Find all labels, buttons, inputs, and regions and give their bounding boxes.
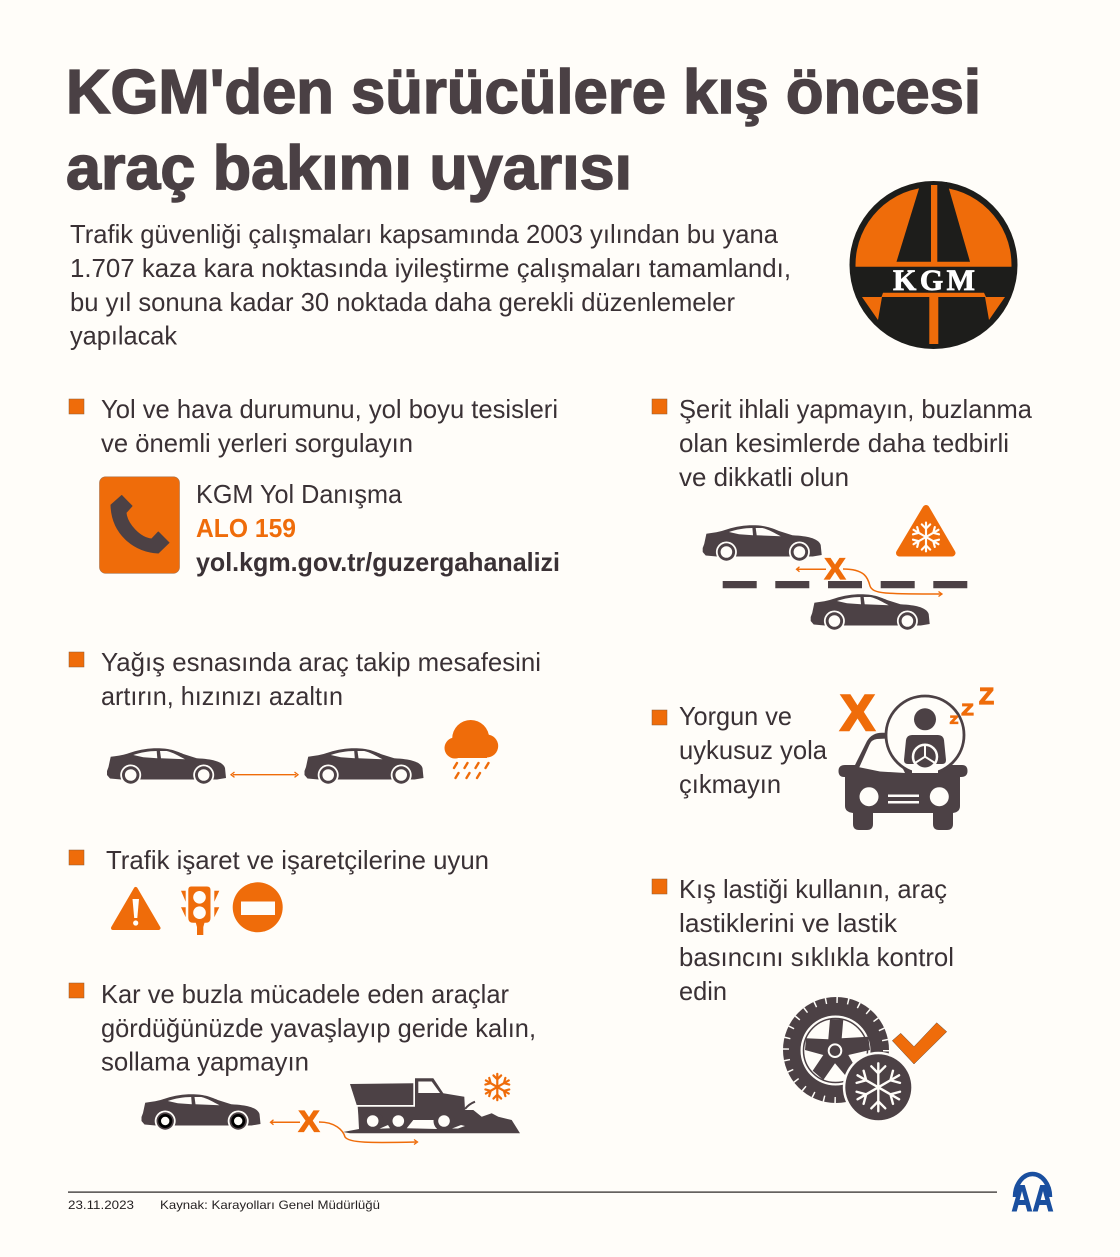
intro text: bu yıl sonuna kadar 30 noktada daha gerekli düzenlemeler xyxy=(70,287,735,317)
road markings xyxy=(723,581,967,588)
icon: car xyxy=(142,1094,260,1132)
icon: orange snowflake xyxy=(484,1074,511,1100)
intro text: yapılacak xyxy=(70,320,178,350)
source: Kaynak: Karayolları Genel Müdürlüğü xyxy=(160,1198,380,1212)
text: winter tyres: basıncını sıklıkla kontrol xyxy=(679,942,954,972)
icon: check mark xyxy=(892,1023,947,1064)
icon: X mark: X xyxy=(840,685,874,741)
text: winter tyres: edin xyxy=(679,976,727,1006)
icon: car 1 xyxy=(107,748,226,786)
text: road info: ve önemli yerleri sorgulayın xyxy=(101,428,413,458)
panel: traffic signs xyxy=(69,845,489,935)
panel: rain distance xyxy=(69,647,541,786)
icon: AA logo: AA xyxy=(1012,1178,1054,1219)
icon: car 2 xyxy=(304,748,424,786)
bullet xyxy=(69,399,84,414)
text: hotline: KGM Yol Danışma xyxy=(196,479,403,509)
arrow: overtaking forbidden: X xyxy=(298,1106,320,1138)
text: road info: Yol ve hava durumunu, yol boyu tesisleri xyxy=(101,394,558,424)
icon: KGM logo xyxy=(850,181,1018,349)
bullet xyxy=(69,983,84,998)
bullet xyxy=(69,850,84,865)
icon: snow plough xyxy=(343,1078,520,1133)
footer xyxy=(68,1192,997,1212)
text: hotline: yol.kgm.gov.tr/guzergahanalizi xyxy=(196,547,560,577)
panel: road info xyxy=(69,394,560,577)
text: snow plough: Kar ve buzla mücadele eden araçlar xyxy=(101,979,509,1009)
icon: ice warning sign xyxy=(900,508,952,553)
panel: tired driver xyxy=(652,683,994,830)
text: snow plough xyxy=(101,979,536,1076)
intro text: 1.707 kaza kara noktasında iyileştirme çalışmaları tamamlandı, xyxy=(70,253,791,283)
text: road info xyxy=(101,394,558,458)
text: lane violation: Şerit ihlali yapmayın, buzlanma xyxy=(679,394,1033,424)
text: tired driver: uykusuz yola xyxy=(679,735,828,765)
arrow: overtaking forbidden xyxy=(270,1106,418,1144)
icon: sleep Z letters: Z xyxy=(962,702,974,719)
icon: warning triangle xyxy=(113,889,158,928)
text: winter tyres xyxy=(679,874,954,1006)
panel: winter tyres xyxy=(652,874,954,1123)
icon: sleep Z letters xyxy=(950,683,994,726)
icon: sleep Z letters: Z xyxy=(950,714,958,726)
text: traffic signs: Trafik işaret ve işaretçilerine uyun xyxy=(106,845,489,875)
text: hotline xyxy=(196,479,560,577)
title: KGM'den sürücülere kış öncesi xyxy=(66,58,981,127)
bullet xyxy=(69,652,84,667)
bullet xyxy=(652,710,667,725)
arrow: distance xyxy=(231,772,298,777)
icon: snow disc xyxy=(843,1052,914,1123)
icon: sleep Z letters: Z xyxy=(979,683,994,709)
icon: upper car xyxy=(703,525,822,562)
arrow: lane change forbidden: X xyxy=(824,553,846,586)
icon: KGM logo: KGM xyxy=(893,264,975,297)
text: lane violation: ve dikkatli olun xyxy=(679,462,849,492)
text: tired driver: Yorgun ve xyxy=(679,701,792,731)
text: hotline: ALO 159 xyxy=(196,513,296,543)
text: tired driver xyxy=(679,701,828,799)
date: 23.11.2023 xyxy=(68,1198,134,1212)
icon: tyre xyxy=(783,997,889,1103)
text: snow plough: sollama yapmayın xyxy=(101,1046,309,1076)
text: tired driver: çıkmayın xyxy=(679,769,781,799)
text: winter tyres: Kış lastiği kullanın, araç xyxy=(679,874,947,904)
text: rain distance: artırın, hızınızı azaltın xyxy=(101,681,343,711)
bullet xyxy=(652,879,667,894)
panel: lane violation xyxy=(652,394,1033,632)
icon: car with driver xyxy=(838,696,968,830)
intro text: Trafik güvenliği çalışmaları kapsamında 2003 yılından bu yana xyxy=(70,219,779,249)
text: rain distance xyxy=(101,647,541,711)
bullet xyxy=(652,399,667,414)
intro text xyxy=(70,219,791,350)
text: rain distance: Yağış esnasında araç takip mesafesini xyxy=(101,647,541,677)
panel: snow plough xyxy=(69,979,536,1144)
title xyxy=(66,58,981,203)
text: lane violation xyxy=(679,394,1033,492)
icon: no entry xyxy=(233,882,283,932)
icon: traffic light xyxy=(181,886,219,935)
arrow: lane change forbidden xyxy=(796,553,942,596)
text: winter tyres: lastiklerini ve lastik xyxy=(679,908,898,938)
text: lane violation: olan kesimlerde daha tedbirli xyxy=(679,428,1009,458)
icon: lower car xyxy=(811,594,930,632)
icon: phone xyxy=(100,477,180,573)
icon: rain cloud xyxy=(444,720,498,778)
text: snow plough: gördüğünüzde yavaşlayıp geride kalın, xyxy=(101,1013,536,1043)
title: araç bakımı uyarısı xyxy=(66,134,632,203)
